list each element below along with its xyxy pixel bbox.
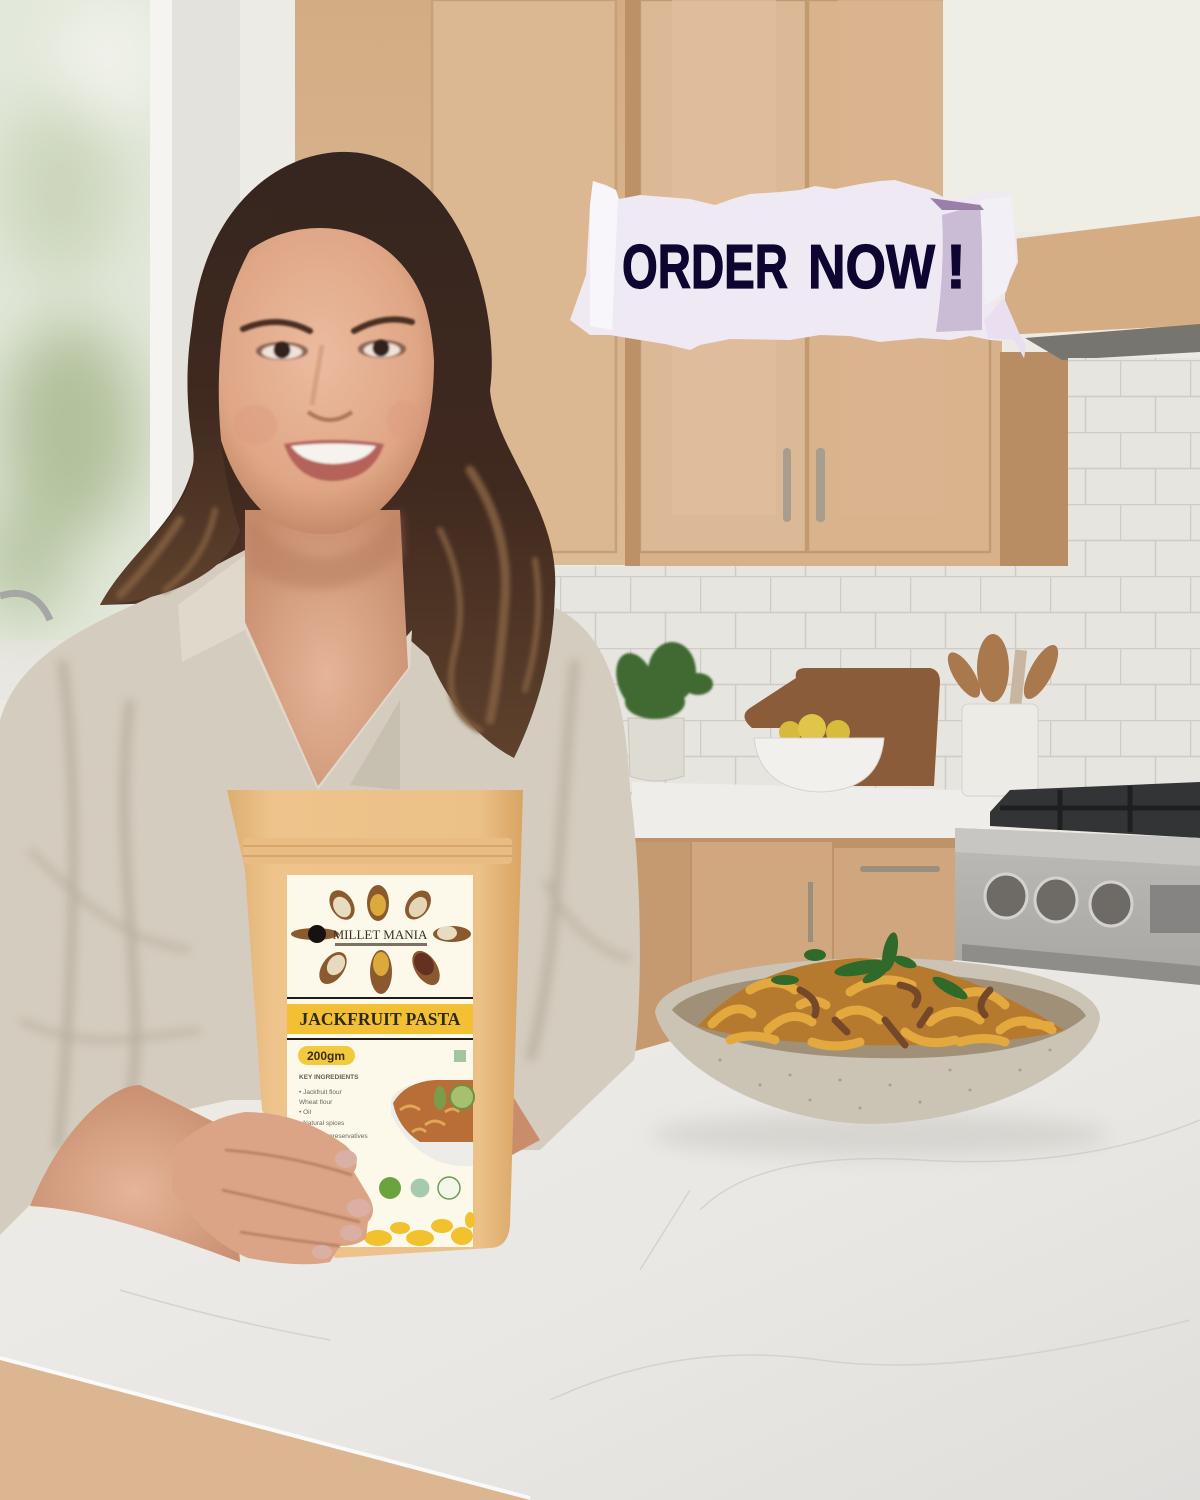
neck and chest [245, 510, 408, 786]
cutting board [744, 668, 940, 786]
call to action text [622, 233, 966, 302]
pouch label: • Natural spices [299, 1120, 345, 1127]
upper cabinets [295, 0, 1068, 568]
call to action text: ! [946, 233, 966, 302]
faucet [0, 593, 50, 620]
lower cabinets [632, 838, 962, 1058]
certification badges [379, 1177, 460, 1199]
island marble counter [0, 960, 1200, 1500]
hair front [100, 155, 555, 758]
call to action text: NOW [808, 233, 935, 302]
hair back [100, 152, 555, 758]
island wood front [0, 1360, 530, 1500]
pouch label: No added preservatives [299, 1133, 368, 1140]
bowl of lemons [754, 714, 884, 792]
window [0, 0, 295, 700]
product name banner [287, 1004, 473, 1034]
left forearm [30, 1085, 540, 1262]
pasta pieces [364, 1212, 475, 1246]
weight badge: 200gm [307, 1049, 345, 1063]
ingredients: KEY INGREDIENTS [299, 1074, 359, 1081]
face [193, 228, 434, 534]
product name banner: JACKFRUIT PASTA [300, 1009, 461, 1029]
product pouch [227, 790, 523, 1258]
pouch label: • Oil [299, 1109, 312, 1116]
pasta dish [655, 931, 1100, 1124]
shirt [0, 550, 640, 1235]
hand holding pouch [172, 1112, 373, 1264]
back counter [632, 782, 1000, 852]
range hood [943, 0, 1200, 360]
torn paper banner [570, 180, 1027, 358]
weight badge [298, 1046, 355, 1065]
utensil crock [942, 634, 1065, 796]
stove [955, 782, 1200, 985]
pouch label: • Jackfruit flour [299, 1089, 343, 1096]
pouch label: Wheat flour [299, 1099, 333, 1106]
pasta bowl illustration [391, 1080, 474, 1166]
brand name: MILLET MANIA [333, 927, 428, 942]
tile backsplash [550, 566, 1200, 796]
logo: millet spoons [291, 885, 471, 994]
call to action text: ORDER [622, 233, 788, 302]
pouch label [287, 875, 475, 1247]
potted plant [609, 642, 713, 781]
